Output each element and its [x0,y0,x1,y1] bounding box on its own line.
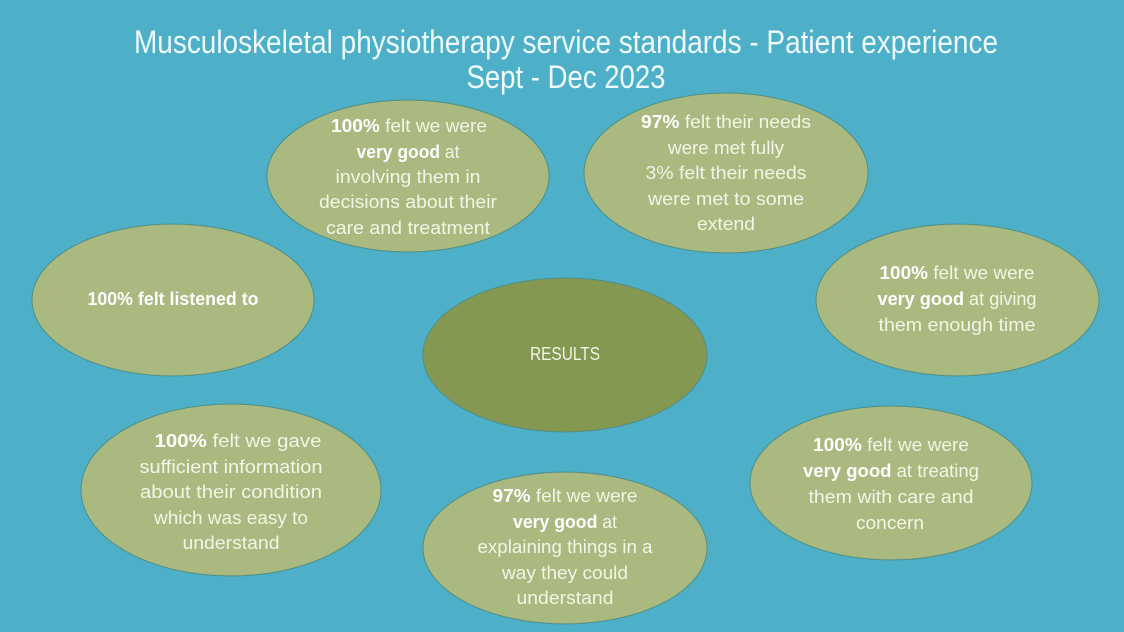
panel: sufficient information: 100% felt we gave [154,431,322,451]
panel: enough time: very good at giving [878,289,1036,309]
panel: involving them in decisions [267,100,549,252]
panel: explaining things: understand [516,588,614,608]
panel: involving them in decisions: care and treatment [326,218,490,238]
title: Sept - Dec 2023 [466,59,666,95]
panel: results centre [423,278,707,432]
panel: results centre: RESULTS [530,344,600,364]
panel: involving them in decisions: decisions about their [319,192,497,212]
panel: care and concern: concern [856,513,924,533]
panel: explaining things [423,472,707,624]
panel: sufficient information [81,404,381,576]
panel: enough time: them enough time [878,315,1036,335]
panel: needs met: were met to some [647,189,804,209]
panel: involving them in decisions: very good at [356,142,460,162]
panel: sufficient information: sufficient information [140,457,322,477]
panel: care and concern: 100% felt we were [813,435,969,455]
panel: involving them in decisions: 100% felt we were [331,116,487,136]
panel: enough time: 100% felt we were [880,263,1034,283]
panel: felt listened to [32,224,314,376]
panel: sufficient information: about their condition [140,482,322,502]
panel: needs met [584,93,868,253]
title [134,24,998,95]
panel: care and concern: very good at treating [803,461,979,481]
panel: explaining things: very good at [513,512,617,532]
panel: needs met: were met fully [667,138,784,158]
panel: explaining things: 97% felt we were [492,486,638,506]
panel: felt listened to: 100% felt listened to [88,289,258,309]
panel: involving them in decisions: involving them in [336,167,480,187]
panel: explaining things: way they could [501,563,628,583]
panel: care and concern: them with care and [808,487,974,507]
title: Musculoskeletal physiotherapy service standards - Patient experience [134,24,998,60]
panel: enough time [816,224,1099,376]
panel: explaining things: explaining things in a [478,537,654,557]
panel: sufficient information: which was easy to [153,508,308,528]
panel: needs met: 3% felt their needs [646,163,806,183]
panel: sufficient information: understand [182,533,280,553]
panel: care and concern [750,406,1032,560]
panel: needs met: extend [697,214,755,234]
panel: needs met: 97% felt their needs [641,112,811,132]
